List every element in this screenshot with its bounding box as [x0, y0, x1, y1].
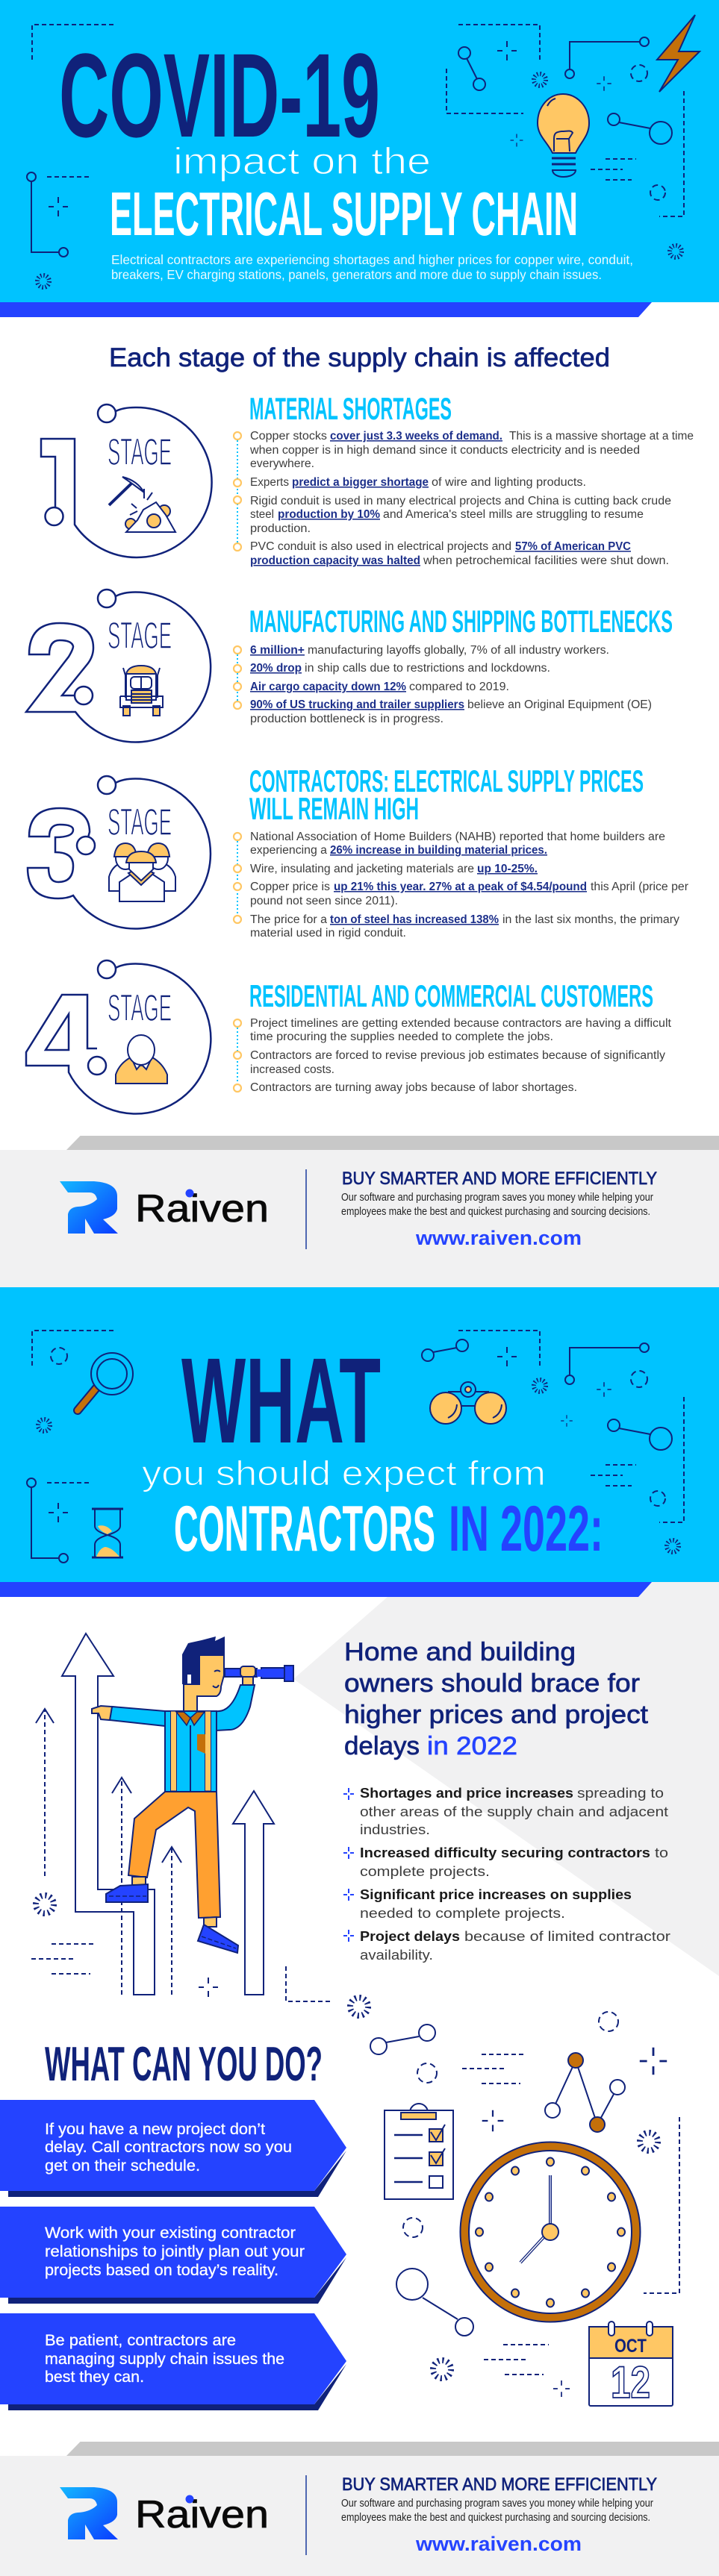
callout: existing contractors: Work with your existing contractor	[45, 2225, 296, 2242]
list: expectations: complete projects.	[360, 1863, 490, 1879]
stage 3 bullets	[234, 831, 688, 940]
list: expectations: Shortages and price increases	[360, 1785, 573, 1801]
footer 2 text	[341, 2475, 657, 2555]
stage 1 bullets: 57% of American PVC	[515, 540, 631, 553]
stage 2 bullets: in ship calls due to restrictions and lockdowns.	[305, 662, 550, 675]
list: expectations: Significant price increases on supplies	[360, 1886, 632, 1902]
stage 3 bullets: this April (price per	[591, 881, 688, 893]
callout: new project: delay. Call contractors now so you	[45, 2139, 292, 2156]
heading: home and building owners: Home and building	[344, 1638, 576, 1666]
stage 1 bullets	[234, 430, 694, 567]
stage 4 bullets: Contractors are forced to revise previous job estimates because of significantly	[250, 1049, 665, 1062]
panel: header top	[0, 0, 719, 317]
list: expectations: other areas of the supply chain and adjacent	[360, 1804, 668, 1819]
man: head	[182, 1636, 225, 1711]
list: expectations: because of limited contractor	[464, 1928, 670, 1944]
callout: new project: get on their schedule.	[45, 2157, 200, 2175]
stage 4 bullets: Project timelines are getting extended because contractors are having a difficult	[250, 1017, 672, 1030]
footer 1 text: www.raiven.com	[415, 1227, 582, 1249]
list: expectations: Project delays	[360, 1928, 460, 1944]
heading: home and building owners: in 2022	[427, 1732, 517, 1760]
callout: be patient	[0, 2313, 346, 2410]
stage 3 bullets: 26% increase in building material prices.	[330, 844, 547, 857]
stage 1 bullets: PVC conduit is also used in electrical projects and	[250, 540, 511, 553]
list: expectations: availability.	[360, 1947, 433, 1963]
footer 1 text: BUY SMARTER AND MORE EFFICIENTLY	[342, 1169, 657, 1189]
footer 2 text: www.raiven.com	[415, 2533, 582, 2555]
panel: stage 1	[41, 391, 694, 567]
callout: be patient: managing supply chain issues the	[45, 2351, 284, 2368]
icon: workers	[109, 843, 175, 901]
header circuit decorations	[27, 25, 684, 287]
background: grey diagonal	[293, 1582, 719, 1976]
decorations around clock	[350, 1998, 679, 2397]
panel: footer 2	[0, 2442, 719, 2576]
header 2 circuit decorations	[27, 1331, 684, 1563]
clock hour markers	[476, 2158, 625, 2307]
icon: clipboard	[385, 2104, 453, 2199]
list: expectations: Increased difficulty securing contractors	[360, 1845, 650, 1860]
stage 1 bullets: production by 10%	[278, 508, 380, 521]
callout: existing contractors: relationships to jointly plan out your	[45, 2243, 305, 2260]
title: COVID-19: COVID-19	[59, 28, 380, 162]
heading: home and building owners: delays	[344, 1732, 420, 1760]
heading: home and building owners: owners should brace for	[344, 1669, 640, 1698]
callout: existing contractors: projects based on today’s reality.	[45, 2262, 278, 2279]
logo: Raiven: Raiven	[135, 1187, 269, 1231]
list: expectations	[343, 1785, 670, 1963]
stage 2 bullets: manufacturing layoffs globally, 7% of all industry workers.	[308, 644, 609, 657]
stage 2 bullets	[234, 644, 652, 725]
panel: header what	[0, 1287, 719, 1597]
stage 1 bullets: of wire and lighting products.	[432, 476, 586, 489]
stage 1 bullets: and America's steel mills are struggling to resume	[383, 508, 644, 521]
list: expectations: spreading to	[577, 1785, 664, 1801]
callout: new project	[0, 2100, 346, 2197]
stage 3 badge: STAGE	[108, 801, 172, 843]
icon: light bulb	[538, 94, 589, 177]
icon: lightning bolt	[657, 15, 700, 92]
stage 3 title	[249, 763, 644, 826]
stage 2 badge	[26, 590, 211, 742]
stage 3 bullets: ton of steel has increased 138%	[330, 913, 499, 926]
icon: calendar: 12	[611, 2357, 650, 2407]
logo: Raiven bottom	[60, 2487, 269, 2539]
title: you should expect from: you should expect from	[142, 1454, 546, 1492]
stage 4 bullets	[234, 1017, 672, 1094]
list: expectations: needed to complete projects.	[360, 1905, 565, 1921]
stage 4 bullets: Contractors are turning away jobs because of labor shortages.	[250, 1081, 577, 1094]
stage 1 bullets: production.	[250, 522, 311, 535]
stage 1 bullets: when copper is in high demand since it conducts electricity and is needed	[249, 444, 640, 457]
icon: clock	[460, 2142, 641, 2322]
panel: stage 4	[26, 960, 672, 1113]
footer 2 text: Our software and purchasing program saves you money while helping your	[341, 2497, 653, 2510]
title: contractors in 2022: CONTRACTORS	[174, 1493, 435, 1565]
stage 4 badge: STAGE	[108, 987, 172, 1029]
stage 3 bullets: Copper price is	[250, 881, 330, 893]
rising arrows	[31, 1634, 330, 2001]
stage 1 bullets: Experts	[250, 476, 289, 489]
stage 2 bullets: Air cargo capacity down 12%	[250, 681, 406, 693]
stage 2 bullets: believe an Original Equipment (OE)	[467, 698, 652, 711]
man: shoes	[106, 1877, 238, 1953]
stage 1 badge	[41, 404, 212, 557]
list: expectations: industries.	[360, 1822, 430, 1837]
stage 1 bullets: everywhere.	[250, 457, 314, 470]
stage 4 badge	[26, 960, 211, 1113]
panel: footer 1	[0, 1136, 719, 1287]
stage 1 badge: STAGE	[108, 431, 172, 473]
stage 2 badge: STAGE	[108, 614, 172, 657]
heading: home and building owners: higher prices and project	[344, 1701, 649, 1729]
stage 3 bullets: National Association of Home Builders (NAHB) reported that home builders are	[250, 831, 665, 843]
callout: new project: If you have a new project don’t	[45, 2121, 265, 2138]
logo: Raiven	[60, 1181, 269, 1234]
heading: home and building owners	[344, 1638, 649, 1760]
intro text	[111, 252, 633, 282]
stage 3 bullets: up 10-25%.	[477, 863, 538, 875]
stage 1 bullets: cover just 3.3 weeks of demand.	[330, 430, 502, 443]
stage 3 bullets: up 21% this year. 27% at a peak of $4.54/pound	[334, 881, 587, 893]
stage 2 bullets: 90% of US trucking and trailer suppliers	[250, 698, 464, 711]
title: contractors in 2022: IN 2022:	[449, 1493, 603, 1565]
title: WHAT: WHAT	[181, 1332, 381, 1469]
stage 3 bullets: Wire, insulating and jacketing materials are	[250, 863, 474, 875]
man: trousers	[128, 1792, 220, 1918]
icon: pickaxe and ore	[109, 477, 175, 532]
stage 1 title: MATERIAL SHORTAGES	[249, 391, 452, 426]
stage 1 bullets: predict a bigger shortage	[292, 476, 429, 489]
stage 3 badge	[28, 776, 211, 928]
stage 2 bullets: production bottleneck is in progress.	[250, 713, 443, 725]
stage 1 bullets: steel	[250, 508, 274, 521]
icon: hourglass	[92, 1509, 123, 1557]
icon: magnifier	[78, 1353, 133, 1410]
logo: Raiven bottom: Raiven	[135, 2493, 269, 2536]
icon: network nodes	[545, 2053, 625, 2132]
illustration: man with telescope	[92, 1636, 293, 1953]
stage 1 bullets: This is a massive shortage at a time	[509, 430, 694, 443]
stage 3 bullets: The price for a	[250, 913, 327, 926]
icon: binoculars	[430, 1382, 506, 1424]
icon: calendar	[589, 2322, 673, 2407]
stage 3 bullets: experiencing a	[250, 844, 327, 857]
stage 3 bullets: in the last six months, the primary	[502, 913, 679, 926]
intro text: Electrical contractors are experiencing shortages and higher prices for copper wire, conduit,	[111, 252, 633, 267]
stage 2 bullets: compared to 2019.	[409, 681, 509, 693]
footer 2 text: employees make the best and quickest purchasing and sourcing decisions.	[341, 2511, 650, 2524]
clock hands	[520, 2175, 558, 2263]
footer 1 text	[341, 1169, 657, 1249]
panel: stage 2	[26, 590, 673, 742]
stage 3 title: WILL REMAIN HIGH	[249, 791, 419, 826]
stage 2 bullets: 6 million+	[250, 644, 305, 657]
footer 1 text: Our software and purchasing program saves you money while helping your	[341, 1191, 653, 1204]
stage 4 bullets: time procuring the supplies needed to complete the jobs.	[250, 1031, 553, 1043]
footer 1 text: employees make the best and quickest purchasing and sourcing decisions.	[341, 1205, 650, 1218]
stage 3 bullets: pound not seen since 2011).	[250, 895, 398, 907]
icon: customer	[116, 1035, 167, 1084]
icon: calendar: OCT	[614, 2336, 647, 2357]
heading: what can you do: WHAT CAN YOU DO?	[45, 2036, 323, 2091]
callout: be patient: best they can.	[45, 2369, 144, 2386]
stage 1 bullets: production capacity was halted	[250, 554, 420, 567]
stage 1 bullets: Copper stocks	[250, 430, 327, 443]
list: expectations: to	[655, 1845, 668, 1860]
icon: truck	[120, 666, 163, 716]
footer 2 text: BUY SMARTER AND MORE EFFICIENTLY	[342, 2475, 657, 2495]
callout: existing contractors	[0, 2207, 346, 2304]
panel: arrows and person	[31, 1634, 330, 2001]
panel: stage 3	[28, 763, 688, 940]
stage 3 bullets: material used in rigid conduit.	[250, 927, 406, 940]
stage 1 bullets: when petrochemical facilities were shut down.	[423, 554, 669, 567]
stage 1 bullets: Rigid conduit is used in many electrical projects and China is cutting back crude	[250, 495, 671, 507]
man: back arm and shirt	[92, 1685, 255, 1792]
intro text: breakers, EV charging stations, panels, generators and more due to supply chain issues.	[111, 267, 602, 282]
heading: each stage: Each stage of the supply chain is affected	[109, 343, 610, 372]
stage 2 bullets: 20% drop	[250, 662, 302, 675]
man: telescope	[225, 1666, 293, 1685]
title: impact on the: impact on the	[173, 140, 431, 182]
stage 4 bullets: increased costs.	[250, 1063, 334, 1076]
callout: be patient: Be patient, contractors are	[45, 2332, 236, 2349]
